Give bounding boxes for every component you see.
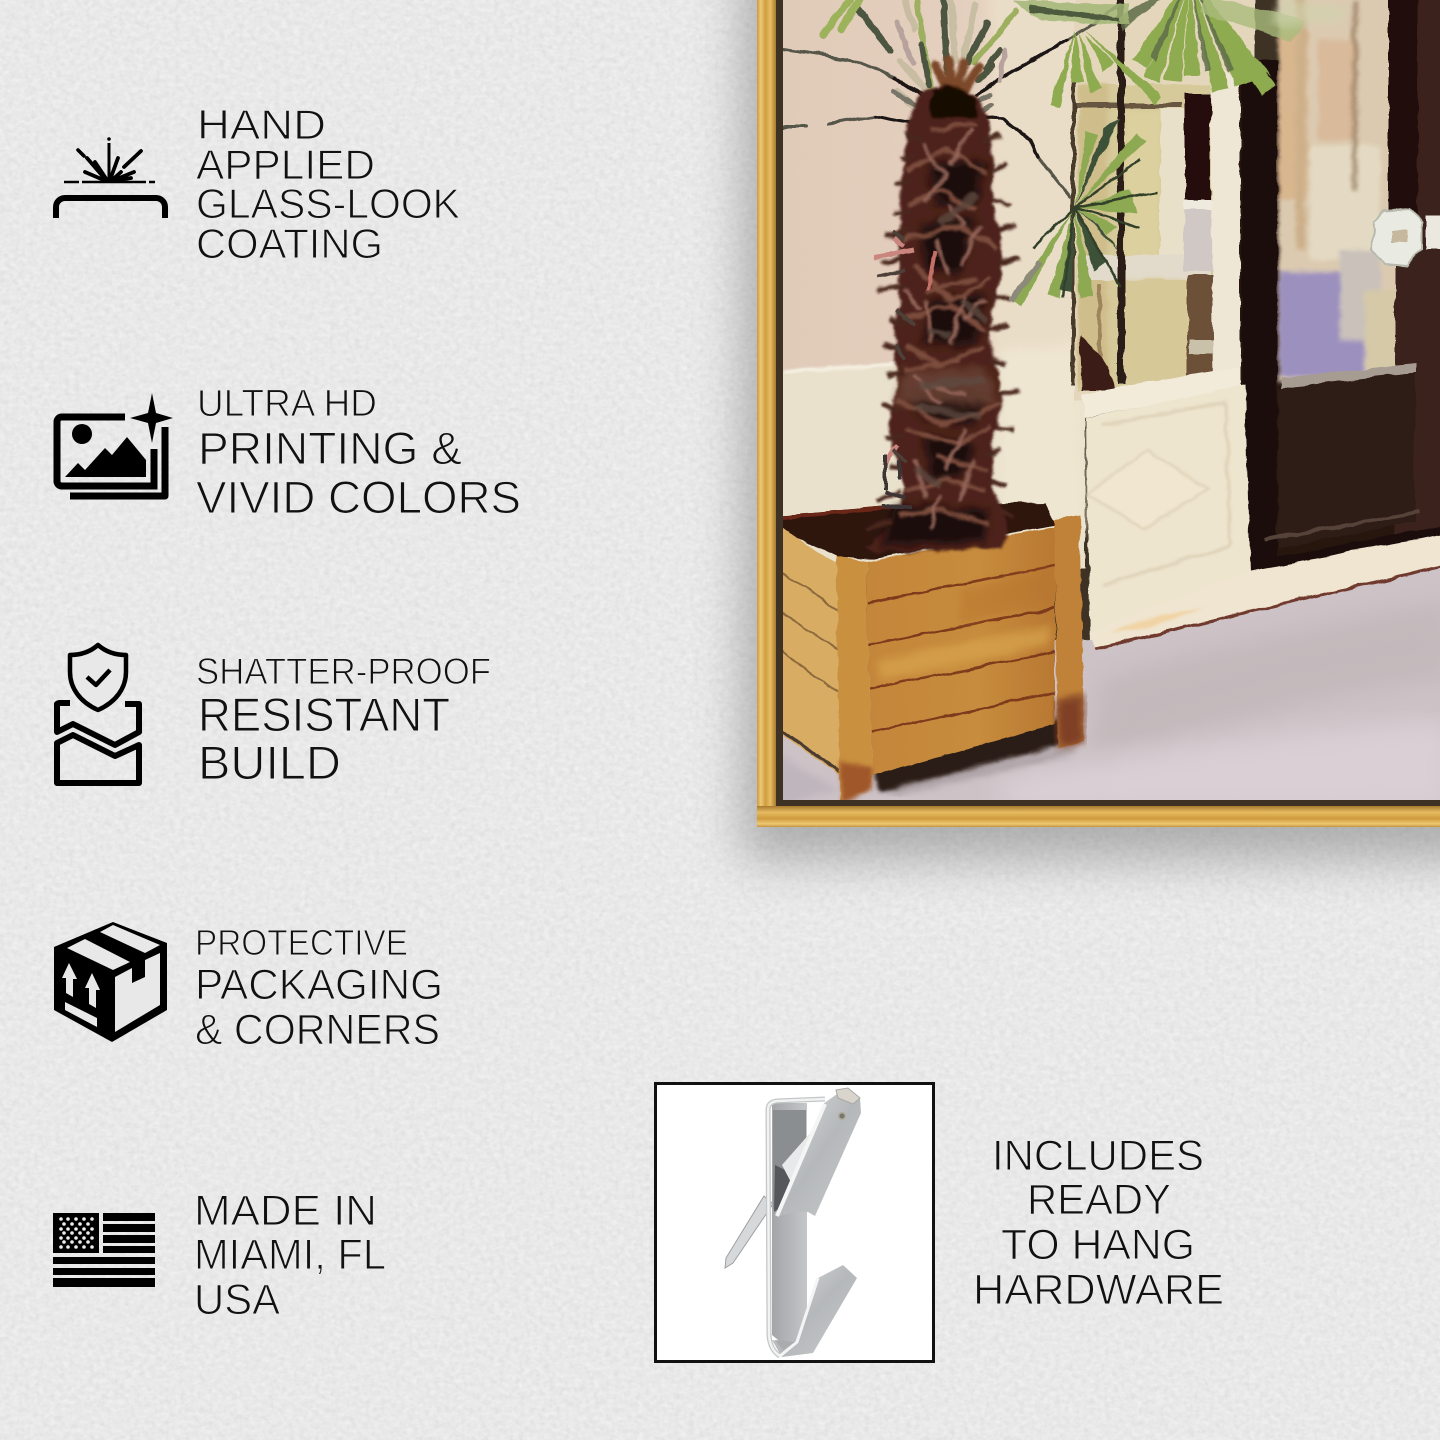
icon: picture with sparkle bbox=[57, 393, 173, 496]
hook outline bbox=[768, 1099, 825, 1356]
text: shatter-proof bbox=[196, 651, 491, 789]
text: ultra hd printing: PRINTING & bbox=[198, 423, 462, 474]
panel: framed painting bbox=[757, 0, 1440, 827]
feature: protective packaging bbox=[54, 922, 443, 1054]
left frond cluster bbox=[1013, 0, 1162, 108]
front plate bbox=[777, 1094, 861, 1217]
icon: shield over cracked glass bbox=[57, 645, 139, 783]
text: protective packaging: PROTECTIVE bbox=[195, 922, 408, 963]
small mid fan bbox=[1012, 118, 1157, 306]
pavement bbox=[783, 568, 1440, 800]
icon: shipping box bbox=[54, 922, 167, 1042]
text: shatter-proof: SHATTER-PROOF bbox=[196, 651, 491, 692]
left face bbox=[783, 528, 840, 776]
text: shatter-proof: RESISTANT bbox=[198, 688, 450, 741]
text: includes ready to hang hardware: INCLUDES bbox=[992, 1132, 1204, 1180]
white window post bbox=[1081, 68, 1242, 418]
corner posts bbox=[836, 556, 872, 800]
nail bbox=[725, 1196, 773, 1268]
shop window bbox=[1072, 0, 1255, 400]
trunk accents bbox=[875, 232, 935, 507]
image: sawtooth hook bbox=[725, 1088, 861, 1357]
text: hand applied bbox=[196, 101, 460, 267]
frame shadow bbox=[742, 0, 1440, 860]
front face bbox=[866, 527, 1055, 776]
feature: ultra hd printing bbox=[57, 383, 521, 523]
icon: american flag bbox=[53, 1213, 155, 1287]
palm crown base bbox=[935, 60, 978, 105]
soil bbox=[770, 503, 1056, 560]
dark door bbox=[1240, 0, 1440, 580]
text: includes ready to hang hardware: HARDWARE bbox=[973, 1266, 1224, 1314]
panel: hanging hardware photo bbox=[656, 1084, 934, 1362]
text: hand applied: GLASS-LOOK bbox=[196, 180, 460, 227]
text: includes ready to hang hardware: READY bbox=[1027, 1176, 1171, 1224]
large top fan bbox=[1119, 0, 1308, 96]
feature: hand applied glass-look coating bbox=[56, 101, 460, 267]
feature: made in miami bbox=[53, 1187, 386, 1324]
text: shatter-proof: BUILD bbox=[198, 736, 341, 789]
icon: glass coating sparkle bbox=[56, 137, 165, 218]
trunk hairs bbox=[868, 135, 1018, 530]
text: made in miami bbox=[194, 1187, 386, 1324]
text: ultra hd printing bbox=[196, 383, 521, 523]
palm trunk bbox=[866, 85, 1018, 553]
door knob bbox=[1372, 208, 1440, 266]
painted wall bbox=[770, 0, 1085, 570]
painting bbox=[770, 0, 1440, 810]
lower door panel bbox=[1086, 385, 1250, 645]
feature: shatter-proof bbox=[57, 645, 491, 789]
planter bbox=[770, 503, 1084, 804]
text: ultra hd printing: ULTRA HD bbox=[197, 383, 377, 425]
text: made in miami: MADE IN bbox=[194, 1187, 377, 1235]
gold frame bbox=[757, 0, 1440, 827]
back strip bbox=[772, 1103, 807, 1350]
text: ultra hd printing: VIVID COLORS bbox=[196, 472, 521, 523]
nail head bbox=[836, 1088, 860, 1104]
text: includes ready to hang hardware: TO HANG bbox=[1001, 1221, 1195, 1269]
text: hand applied: COATING bbox=[196, 220, 383, 267]
text: hand applied: APPLIED bbox=[196, 141, 375, 188]
text: made in miami: MIAMI, FL bbox=[194, 1231, 386, 1279]
text: made in miami: USA bbox=[194, 1276, 280, 1324]
planter shadow bbox=[873, 718, 1062, 792]
palm fronds behind trunk bbox=[783, 0, 1120, 197]
text: includes ready to hang hardware bbox=[973, 1132, 1224, 1314]
doorstep bbox=[1090, 533, 1440, 649]
lower hook bbox=[772, 1265, 857, 1357]
text: protective packaging bbox=[195, 922, 443, 1054]
text: protective packaging: & CORNERS bbox=[195, 1006, 440, 1054]
text: protective packaging: PACKAGING bbox=[195, 961, 443, 1009]
text: hand applied: HAND bbox=[197, 101, 326, 148]
